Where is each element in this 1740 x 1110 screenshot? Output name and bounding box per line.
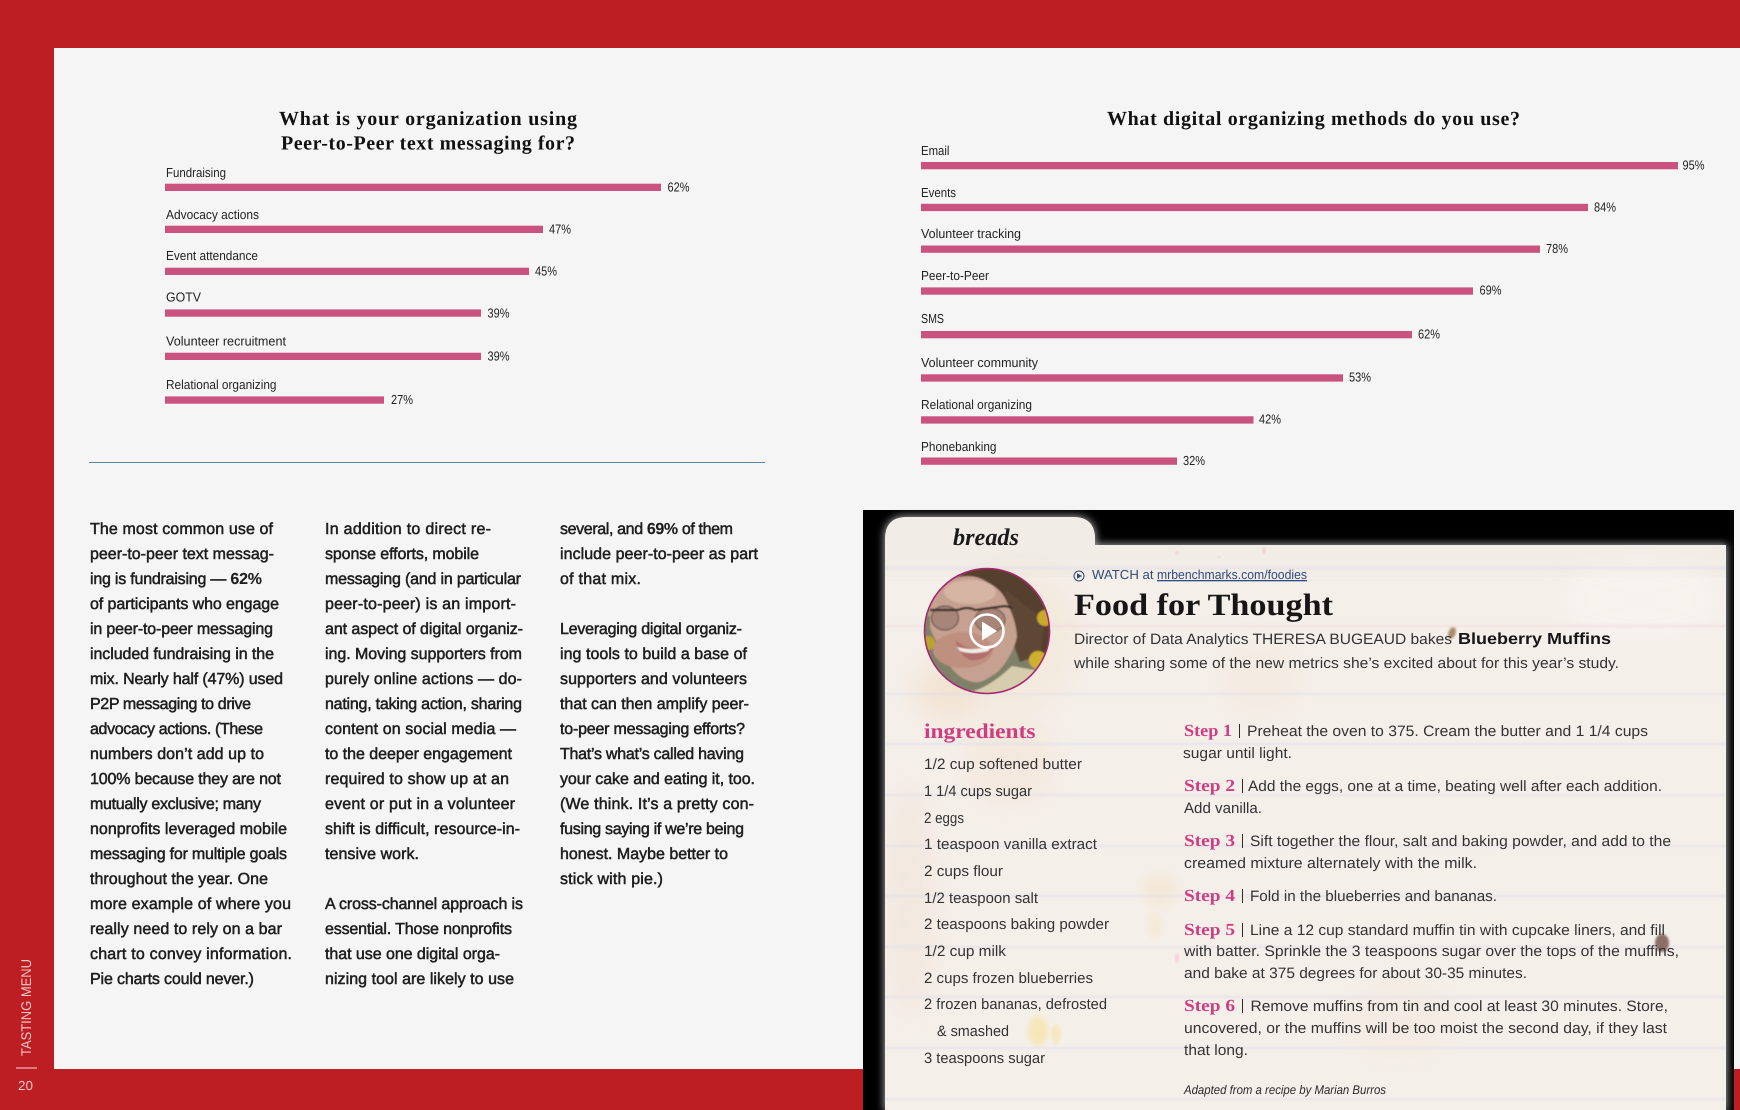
step 3: creamed mixture alternately with the milk. — [1184, 855, 1477, 872]
bar: Advocacy actions: 47% — [549, 222, 571, 236]
body text column 1: really need to rely on a bar — [90, 921, 283, 938]
step 1: Step 1 — [1184, 721, 1232, 740]
recipe paper — [885, 517, 1726, 1110]
body text column 3: of that mix. — [560, 571, 641, 588]
ingredients list: 1/2 cup softened butter — [924, 756, 1082, 773]
body text column 2: tensive work. — [325, 846, 419, 863]
recipe steps — [1183, 721, 1679, 1059]
bar: Relational organizing — [921, 397, 1281, 426]
step 3: Step 3 — [1184, 831, 1235, 850]
step 6: Step 6 — [1184, 996, 1235, 1015]
bar: Volunteer recruitment: Volunteer recruitment — [166, 334, 286, 348]
body text column 2: A cross-channel approach is — [325, 896, 523, 913]
step 6: uncovered, or the muffins will be too moist the second day, if they last — [1184, 1020, 1668, 1037]
body text column 1: numbers don’t add up to — [90, 746, 264, 763]
body text column 3: that can then amplify peer- — [560, 696, 749, 713]
body text column 1: mutually exclusive; many — [90, 796, 261, 813]
bar: Volunteer community — [921, 355, 1371, 384]
bar: Relational organizing: Relational organizing — [921, 397, 1032, 412]
sidebar section label: 20 — [18, 1078, 33, 1093]
step 5 — [1183, 920, 1679, 982]
body text column 2: required to show up at an — [325, 771, 509, 788]
body text column 1: throughout the year. One — [90, 871, 268, 888]
ingredients list — [924, 756, 1109, 1067]
step 3 — [1184, 831, 1671, 872]
body text column 1: ing is fundraising — 62% — [90, 571, 262, 588]
body text column 3: That’s what’s called having — [560, 746, 744, 763]
body text column 2: to the deeper engagement — [325, 746, 513, 763]
bar: Relational organizing: Relational organizing — [166, 377, 276, 392]
body text column 2: messaging (and in particular — [325, 571, 522, 588]
bar: Events: Events — [921, 185, 956, 200]
watch link line: WATCH at — [1092, 567, 1154, 582]
ingredients list: 3 teaspoons sugar — [924, 1050, 1045, 1067]
body text column 3: to-peer messaging efforts? — [560, 721, 745, 738]
ruled lines — [885, 568, 1726, 1099]
ingredients list: & smashed — [937, 1023, 1009, 1040]
body text column 3: (We think. It’s a pretty con- — [560, 796, 754, 813]
body text column 1: chart to convey information. — [90, 946, 292, 963]
step 6 — [1184, 996, 1668, 1059]
paper glow — [885, 517, 1726, 1110]
step 2: Step 2 — [1184, 776, 1235, 795]
bar: SMS: SMS — [921, 311, 944, 326]
body text column 3: supporters and volunteers — [560, 671, 747, 688]
bar: GOTV — [165, 290, 510, 320]
body text column 2: purely online actions — do- — [325, 671, 522, 688]
chart title: What is your organization using — [279, 108, 577, 130]
body text column 1: The most common use of — [90, 521, 274, 538]
step 1 — [1183, 721, 1648, 762]
body text column 2: nating, taking action, sharing — [325, 696, 522, 713]
black backing — [863, 510, 1734, 1110]
step 2: Add the eggs, one at a time, beating well after each addition. — [1248, 778, 1662, 795]
bar: Volunteer tracking — [921, 226, 1568, 256]
recipe credit: Adapted from a recipe by Marian Burros — [1183, 1083, 1386, 1097]
step 1: Preheat the oven to 375. Cream the butter and 1 1/4 cups — [1247, 723, 1648, 740]
bar: Fundraising: 62% — [668, 180, 690, 194]
body text column 3: several, and 69% of them — [560, 521, 733, 538]
body text column 2: ing. Moving supporters from — [325, 646, 522, 663]
bar: Volunteer community: 53% — [1349, 370, 1371, 384]
bar: Phonebanking: Phonebanking — [921, 439, 996, 454]
recipe intro — [1073, 631, 1619, 672]
body text column 3: stick with pie.) — [560, 871, 663, 888]
tab label: breads: breads — [953, 525, 1019, 551]
video thumbnail: presenter portrait — [921, 566, 1053, 696]
bar: SMS: 62% — [1418, 326, 1440, 342]
bar: Fundraising — [165, 165, 690, 194]
body text column 1: peer-to-peer text messag- — [90, 546, 274, 563]
recipe intro: while sharing some of the new metrics she’s excited about for this year’s study. — [1073, 655, 1619, 672]
recipe intro: Blueberry Muffins — [1458, 631, 1611, 648]
recipe title: Food for Thought — [1074, 587, 1334, 622]
ingredients list: 1 teaspoon vanilla extract — [924, 836, 1098, 853]
stains — [1175, 548, 1669, 963]
body text column 1: more example of where you — [90, 896, 291, 913]
ingredients heading: ingredients — [924, 719, 1036, 743]
bar: Event attendance: Event attendance — [166, 248, 258, 263]
body text column 3 — [560, 521, 759, 888]
divider rule — [89, 462, 765, 463]
step 3: Sift together the flour, salt and baking powder, and add to the — [1250, 833, 1671, 850]
ingredients list: 2 eggs — [924, 810, 964, 827]
chart title: What digital organizing methods do you use? — [1107, 108, 1520, 130]
bar: SMS — [921, 311, 1440, 342]
watch link line: mrbenchmarks.com/foodies — [1157, 567, 1307, 582]
bar: Volunteer tracking: 78% — [1546, 241, 1568, 256]
bar: Volunteer recruitment — [165, 334, 510, 364]
bar: GOTV: GOTV — [166, 290, 201, 304]
step 5: Line a 12 cup standard muffin tin with cupcake liners, and fill — [1250, 922, 1665, 939]
ingredients list: 1/2 teaspoon salt — [924, 890, 1039, 907]
body text column 3: your cake and eating it, too. — [560, 771, 755, 788]
bar: Peer-to-Peer: Peer-to-Peer — [921, 268, 990, 283]
bar: Events — [921, 185, 1616, 214]
step 1: sugar until light. — [1183, 745, 1292, 762]
body text column 1: advocacy actions. (These — [90, 721, 263, 738]
icon: play button — [970, 614, 1004, 648]
bar: Volunteer community: Volunteer community — [921, 355, 1038, 370]
body text column 2: event or put in a volunteer — [325, 796, 516, 813]
body text column 1: 100% because they are not — [90, 771, 282, 788]
body text column 1: messaging for multiple goals — [90, 846, 287, 863]
body text column 1: included fundraising in the — [90, 646, 274, 663]
bar: Relational organizing — [165, 377, 413, 407]
body text column 1: in peer-to-peer messaging — [90, 621, 273, 638]
bar: Peer-to-Peer — [921, 268, 1502, 298]
sidebar section label: TASTING MENU — [18, 959, 34, 1056]
bar: Advocacy actions — [165, 207, 571, 236]
chart title: Peer-to-Peer text messaging for? — [281, 132, 575, 154]
body text column 3: include peer-to-peer as part — [560, 546, 759, 563]
step 4: Step 4 — [1184, 886, 1236, 905]
bar: Volunteer tracking: Volunteer tracking — [921, 226, 1021, 241]
bar: Events: 84% — [1594, 200, 1616, 214]
ingredients list: 2 teaspoons baking powder — [924, 916, 1109, 933]
body text column 2: that use one digital orga- — [325, 946, 500, 963]
step 2: Add vanilla. — [1184, 800, 1262, 817]
bar chart: peer-to-peer text messaging uses — [165, 108, 690, 407]
body text column 1: of participants who engage — [90, 596, 279, 613]
ingredients list: 2 cups flour — [924, 863, 1003, 880]
bar: Event attendance: 45% — [535, 264, 557, 278]
body text column 1: nonprofits leveraged mobile — [90, 821, 287, 838]
body text column 2: In addition to direct re- — [325, 521, 491, 538]
body text column 1: mix. Nearly half (47%) used — [90, 671, 283, 688]
body text column 2: peer-to-peer) is an import- — [325, 596, 516, 613]
ingredients list: 2 frozen bananas, defrosted — [924, 996, 1107, 1013]
body text column 3: fusing saying if we’re being — [560, 821, 744, 838]
body text column 1: Pie charts could never.) — [90, 971, 254, 988]
step 5: Step 5 — [1184, 920, 1235, 939]
sidebar section label — [16, 959, 37, 1093]
bar: Fundraising: Fundraising — [166, 165, 226, 180]
bar: Phonebanking — [921, 439, 1205, 468]
panel: recipe card — [863, 510, 1734, 1110]
body text column 2: content on social media — — [325, 721, 516, 738]
step 6: Remove muffins from tin and cool at least 30 minutes. Store, — [1250, 998, 1668, 1015]
bar: Email: Email — [921, 143, 949, 158]
bar: Peer-to-Peer: 69% — [1480, 282, 1502, 298]
chart title — [279, 108, 577, 154]
watch link line — [1074, 567, 1307, 582]
step 5: with batter. Sprinkle the 3 teaspoons sugar over the tops of the muffins, — [1183, 943, 1679, 960]
step 2 — [1184, 776, 1662, 817]
bar: Email: 95% — [1682, 158, 1705, 172]
bar: Volunteer recruitment: 39% — [488, 348, 510, 364]
bar: Email — [921, 143, 1705, 172]
ingredients list: 1/2 cup milk — [924, 943, 1006, 960]
body text column 2: sponse efforts, mobile — [325, 546, 479, 563]
step 6: that long. — [1184, 1042, 1248, 1059]
body text column 3: ing tools to build a base of — [560, 646, 748, 663]
body text column 2 — [325, 521, 523, 988]
step 4 — [1184, 886, 1497, 905]
body text column 2: shift is difficult, resource-in- — [325, 821, 520, 838]
recipe intro: Director of Data Analytics THERESA BUGEAUD bakes — [1074, 631, 1452, 648]
ingredients list: 1 1/4 cups sugar — [924, 783, 1032, 800]
step 5: and bake at 375 degrees for about 30-35 minutes. — [1184, 965, 1527, 982]
bar: Advocacy actions: Advocacy actions — [166, 207, 259, 222]
bar: Phonebanking: 32% — [1183, 453, 1205, 468]
body text column 3: Leveraging digital organiz- — [560, 621, 742, 638]
bar: Event attendance — [165, 248, 557, 278]
body text column 1: P2P messaging to drive — [90, 696, 251, 713]
bar: GOTV: 39% — [488, 306, 510, 320]
body text column 2: essential. Those nonprofits — [325, 921, 512, 938]
body text column 2: ant aspect of digital organiz- — [325, 621, 523, 638]
body text column 2: nizing tool are likely to use — [325, 971, 514, 988]
body text column 1 — [90, 521, 292, 988]
bar: Relational organizing: 42% — [1259, 412, 1281, 426]
bar: Relational organizing: 27% — [391, 392, 413, 407]
bar chart: digital organizing methods — [921, 108, 1705, 468]
ingredients list: 2 cups frozen blueberries — [924, 970, 1093, 987]
body text column 3: honest. Maybe better to — [560, 846, 728, 863]
step 4: Fold in the blueberries and bananas. — [1250, 888, 1497, 905]
